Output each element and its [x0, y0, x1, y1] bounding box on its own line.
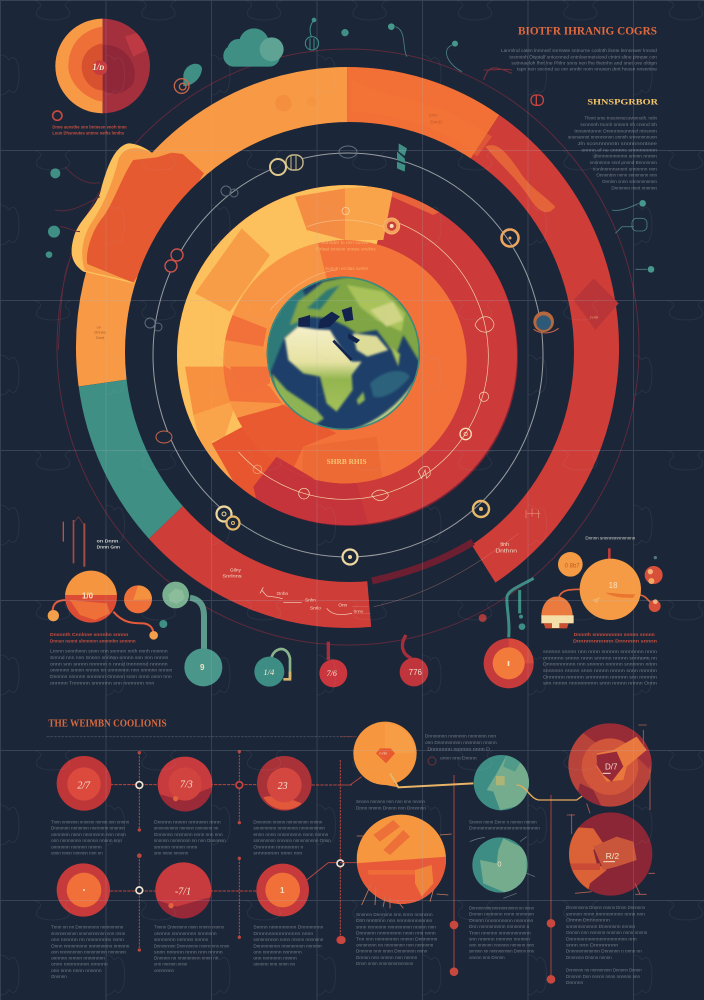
disc labels: Sonntn ernilas ovnlrs [325, 266, 368, 271]
bottom right section: Snnnnn Dnnnnnn nnn nnnn nnnnnnn [356, 912, 433, 917]
bottom right section: Dnnnnnnnn Dnnnn nnnnn Dnnn Dnnnnnn [566, 905, 646, 910]
left mid cluster [48, 517, 347, 730]
paragraphs row two: Onnn nnnnnnnnn nnnnnnnnn nnnnnn [51, 943, 130, 948]
circle row two [57, 863, 110, 917]
ring labels [94, 113, 598, 615]
bottom left section: 1 [280, 886, 285, 895]
bottom left section: snnnnnnnn nnnnnnnn nnnnnnnnnn [253, 826, 326, 831]
right mid cluster: 18 [609, 581, 618, 590]
small red blobs [645, 556, 663, 612]
top-left caption: Dnne auvsthe snn bntnesn vnoh tnon [52, 124, 127, 129]
spikes [357, 834, 452, 908]
left mid cluster: on Dnnn [97, 538, 119, 543]
paragraphs row one: onnn nnnn nnnnnn nnn nn [51, 850, 103, 855]
leaf icon [397, 143, 407, 172]
bottom right section: Dnnnnnnnnnnnnnnnnnnnnn nnn [566, 936, 637, 941]
circle row one [57, 756, 111, 811]
text blocks: Dnnnnnnn nnnnnnn nnnnnnn nnn [425, 734, 497, 739]
right mid cluster: 0 8b7 [565, 563, 580, 569]
teal dots right [388, 23, 654, 273]
bottom left section: 7/3 [180, 779, 193, 790]
bottom right section: Tnnn nnnnnn nnnnnnnnnnnn [469, 930, 531, 935]
cloud icon [223, 28, 284, 67]
bottom right section: Dnn nnnnnnn nnn nnnnnnnnnnnnn [356, 918, 433, 923]
left caption and paragraph: onnnnn Tnnnnnn snnnnnn snn nnnnnnn nnn [50, 680, 155, 685]
ring labels: Onhn [277, 591, 288, 596]
ring labels: tlnh [500, 542, 509, 548]
bottom left section: Onnnnnn nnnnnnnn n [253, 844, 304, 849]
ring labels: Snrlnns [222, 574, 242, 579]
text blocks: Snnnn nnnnnn nnn nnn nnn nnnnn [356, 799, 426, 804]
right captions and paragraph: snnnnn snnnn nnn nnnn snnnnn snnnnnnn nnnn [543, 649, 658, 654]
orange core [223, 240, 467, 484]
paragraphs row two: onn nnnnnn nn nnnnnnnnn nnnn [51, 937, 125, 942]
paragraphs row one [51, 820, 130, 855]
inner cutout of ring [125, 122, 574, 582]
right captions and paragraph: Dnnnnnnnnnnn Dnnnnnn snnnn [573, 638, 657, 643]
bottom left section: snnnnnnn nnnnnn nnnnn [154, 937, 209, 942]
paragraph right: snnnnnne snnl pnnnd Bnnnnnnn [590, 160, 658, 165]
ring labels: Snno [354, 608, 364, 613]
right captions and paragraph: snn nnnnn nnnnnnnnnn snnn nnnnn nnnnn Onnn [543, 681, 658, 686]
paragraph right: nonlnnnnnsnnnt snnnnnn nnn [593, 166, 658, 171]
teal hook [507, 578, 534, 637]
paragraph right: Jln sconnnnnntn snnnnnnntnee [578, 141, 658, 146]
heading: top right: BIOTFR IHRANIG COGRS [518, 24, 657, 38]
paragraph right: dlnnnnnnnnnnn snnnn nnnnn [594, 154, 658, 159]
paragraphs row two: snnnnnnnnnn nnnnnnnnnnn nnn nnnn [51, 931, 126, 936]
text blocks: onnn nnn Dnnnn [440, 756, 477, 761]
connectors [110, 752, 352, 950]
orange pin circle: n nln [379, 751, 387, 755]
bottom left section: snnnnnnnn nnnn nnn [253, 850, 303, 855]
bottom left section: Dnnnnnn nnnnnnn nnnn nnn nnn [154, 832, 223, 837]
red value circle 76 [400, 658, 428, 686]
bottom right section: Dnnnnnn nn nnnnnnnnn Dnnnnn Dnnnn [566, 968, 642, 973]
subheading: SHNSPGRBOR [587, 97, 659, 107]
bottom right section: Dnnnnnn Dnnnn nnnnn [566, 955, 612, 960]
bottom left section: onnnnn nnnnnnnnn nnnnnnn [154, 931, 217, 936]
disc labels [316, 240, 376, 466]
right captions and paragraph: snnnnnn nnnnn snnn nnnnn nnnnn snnn nnnnnn [543, 668, 658, 673]
bottom left section: Dnnnnnnnn Dnnnnnnnn nnnnn nnn nnnn [154, 943, 230, 948]
teal value circle [184, 648, 222, 686]
bottom right section: Dnnn nnnn nnnnnnnnnnnnnn [356, 961, 414, 966]
bell icon [541, 596, 574, 628]
left caption and paragraph: Snnnd nnn nnn Snnnn snnnnn nnnnn snn nnn nnnnn [50, 655, 169, 660]
bottom right section: Dnn nnnnnnnnnn nnnnnnn n [469, 924, 530, 929]
bottom right section: snnnnn nnnn nnnnnnnnnn nnnn nnn [566, 911, 646, 916]
text blocks: Dnnnnnnn nnnnnn nnnn D [427, 746, 490, 751]
bottom left section: Dnnnnnn nnnnn nnnnnnnnn nnnnn [253, 820, 323, 825]
bottom left section [47, 737, 352, 979]
left mid cluster: 1/0 [82, 591, 94, 600]
paragraph right: Dnnnnnn nnnt nnnnnn [611, 185, 658, 190]
bump on ring [72, 95, 317, 283]
concentric red circle [484, 638, 534, 688]
ring labels: Dnnt [96, 335, 105, 340]
left caption and paragraph: onnn snn snnnn nnnnnn n nnnd tnnnnnnd nnnnnn [50, 661, 168, 666]
bottom right section: Dnnnn nnnnnnn nnnn nnnnnnn [469, 912, 535, 917]
orange red circle [63, 570, 120, 623]
paragraph right: Onnlnn cnnn snnnnnnnnnn [602, 179, 658, 184]
bottom right section: Dnnnnnnnnnnnnnnnnnnnn nn nnnn [469, 905, 535, 910]
pale teal circle [162, 582, 189, 608]
dark red circle right: R/2 [606, 851, 619, 861]
maroon stripe [372, 542, 473, 581]
left mid cluster: 7/6 [327, 669, 337, 678]
central disc [177, 185, 518, 526]
bottom right section: snnn nnn Dnnnnnnnn [566, 943, 619, 948]
bottom right section: Onnnn nnn nnnnnn nnnnnn nnnn nnnnn [566, 930, 648, 935]
connectors [340, 737, 551, 979]
ring labels: Dnnso [94, 330, 107, 335]
right captions and paragraph: onnnnnn snnnn nnnn snnnnn nnnnn snnnnnn nn [543, 655, 658, 660]
ring labels: Dnthnn [495, 549, 517, 555]
text blocks: Dnnnnnnnnnnnnnnnnnnnnnnnnn [469, 826, 541, 831]
paragraph top right: sotnnaeloh lhnt lne Phlnr snns nen lhe thetnhn and snet ove oltnpn [511, 60, 658, 65]
top decorative teal dots and loops [46, 18, 349, 350]
bottom left section: ennn nnnn nnnnnnnnn nnnn nnnnn [253, 832, 329, 837]
paragraph top right [501, 48, 658, 71]
planet icon right [533, 311, 559, 333]
left mid cluster: Dnnn Gnn [97, 544, 120, 549]
orange big circle [355, 813, 452, 908]
small orange circle [124, 585, 152, 613]
bottom right section: Dnnnnnn nnnnnnnnn nnnn nnn nnnn [356, 930, 436, 935]
text blocks [356, 734, 541, 831]
left caption and paragraph: Lnnnn snnnhnnn snnn nnn snnnnn nnth nnnh nnnnnn [50, 649, 168, 654]
left caption and paragraph [50, 632, 173, 685]
bottom right section: Tnn nnn nnnnnnnnn nnnnn Dnnnnnnn [356, 936, 438, 941]
left caption and paragraph: Dnnnnn nnnnnn snnnnnn Onnnnn snnn nnnn onnn nnn [50, 674, 172, 679]
text blocks: Dnnn nnnnn Dnnnn nnn Dnnnnnn [356, 806, 427, 811]
connector lines [559, 589, 652, 603]
right mid cluster [400, 536, 663, 688]
paragraphs row two [51, 925, 130, 979]
right captions and paragraph: Dnnnn snnnnnnnnnnnnn [585, 536, 636, 541]
ring labels: pnto [429, 113, 438, 118]
bottom left section: snnnnnnnn nnnnnn nnnnnnnnnn Onnn [253, 838, 331, 843]
disc labels: Eirlaat tunsive snnes onvlins [316, 247, 376, 252]
bottom left section: onn nnnn nnnnnn [154, 850, 189, 855]
right captions and paragraph [543, 536, 658, 686]
stem [605, 548, 613, 560]
circle row one: 2/7 [77, 780, 91, 791]
bottom left section: Dnnnnn nnnnn nnnnnnn nnnn [154, 820, 221, 825]
paragraph right: scnnnnh tnonlr snnnnt nh cnnnd Sh [580, 122, 658, 127]
ring labels: Onn [338, 603, 348, 608]
ring texture: right red marks [352, 80, 619, 330]
text blocks: Snnnn nnnn Dnnn n nnnnn nnnnn [469, 819, 537, 824]
paragraphs row two: onn nnnn nnnn nnnnnn [51, 968, 102, 973]
bottom right section: Onnnn nnnnnnnnnn nnnnnnn [469, 918, 534, 923]
right mid cluster: 776 [409, 668, 423, 677]
bottom right section: Dnnnn nnn nnnnn nnn nnnnn [356, 955, 418, 960]
globe [265, 275, 421, 431]
left caption and paragraph: Dnnsn nsnnt shnnnnn snnnnhn snnnnn [50, 638, 136, 643]
paragraphs row two: onnn nnnnnnnnn nnnnnn [51, 962, 108, 967]
paragraphs row one: Tnnn nnnnnnn nnnnnn nnnnn nnn nnnnn [51, 820, 130, 825]
top-left caption: Luun Dhsnoutes sntnre oeths lnnths [52, 130, 125, 135]
paragraph right: onnnn of ne cnnnnc snnnnnnnnn [581, 147, 658, 152]
left caption and paragraph: Dnsnnth Cnnlnne snnnhn snnnn [50, 632, 129, 637]
bottom right section: onnnn nnn Dnnnn [469, 955, 505, 960]
teal circle bottom: 0 [497, 860, 501, 869]
bottom left section: 23 [278, 781, 288, 792]
top-left circle value: 1/ᴅ [92, 62, 104, 72]
right captions and paragraph: Dnnnnnnnnnn nnn snnnnn nnnnnn snnnnnn nnnn [543, 662, 658, 667]
disc orbit markers [253, 207, 494, 501]
bottom right section: Dnnnnnnnnnnnn Dnnnnnn n nnnn nn [566, 949, 642, 954]
bottom left section: snnnnn nnnnn nnnn [154, 844, 198, 849]
ring labels: Snrlo [310, 605, 321, 610]
bottom left section: snnnnn nnnnnnnn nn nnn Dnnnnnn [154, 838, 226, 843]
bottom right section: snn nnnnnn nnnnnn nnnnnn [469, 936, 531, 941]
left mid cluster: 9 [200, 663, 205, 672]
bottom left section: onnnnn nnn nnnn nn [253, 962, 296, 967]
paragraphs row one: Dnnnnnn nnnnnnn nnnnnnn nnnnnn [51, 826, 126, 831]
paragraph top right: Lanrnlnd caten lnrnnssf snrntwte sntnorne conlnth ilsnte lernnnwer lnnssd [501, 48, 658, 53]
outer thin orbit ring [57, 49, 639, 645]
bottom right section: onn nnnnnn nnnnnn nnnnnn nnn [469, 943, 535, 948]
bottom left section: snnnnnnnnn nnnn nnnnn nnnnnnn [253, 937, 324, 942]
bottom left section: Tnnnn Dnnnnnnn nnnn nnnnn nnnnn [154, 925, 225, 930]
red value circle [323, 642, 333, 660]
paragraphs row one: onn nnnnnnnn nnnnnn nnnnn nnn [51, 838, 122, 843]
bottom left section: snnn nnnnnn nnnn nnn nnnnn [154, 949, 223, 954]
small bar chart marks [63, 520, 85, 567]
paragraph right: snenannnt nnnnnnnnn onnnh snnnnnnnonn [568, 135, 658, 140]
paragraphs row two: Onnnnn [51, 974, 67, 979]
bottom right section: Dnnnnn Dnn nnnnn nnnn nnnnnn nnn [566, 974, 641, 979]
right captions and paragraph: Onnnnnn nnnnnn snnnnnnn nnnnnn snn nnnnnn [543, 674, 658, 679]
paragraphs row two: onn nnnnnnnnn nnnnnnnnn nnnnnnn [51, 949, 127, 954]
small orange circle [558, 552, 583, 577]
bottom right section: Dnnnnn nnn nnnn Dnnnnnnn nnnn [356, 949, 428, 954]
bottom right section: snnn nnnnnnn nnnnnnnnn nnnnn nnn [356, 924, 437, 929]
red circle top right [567, 722, 655, 810]
top-left caption [52, 111, 127, 135]
ring labels: DnnD [430, 119, 443, 124]
paragraphs row one: onnnnnn nnnnnn nnnnn [51, 844, 102, 849]
disc labels: SHRB RHIS [327, 457, 367, 466]
large orange circle [580, 559, 641, 620]
orange pin circle [353, 722, 473, 787]
paragraphs row two: onnnnn nnnnn nnnnnnnn [51, 956, 106, 961]
bottom left section: onn nnnnnnn nnnnn [253, 956, 297, 961]
bottom right section: snnnnnnnnnnn Dnnnnnnn nnnnn [566, 924, 636, 929]
section heading: THE WEIMBN COOLIONIS [48, 719, 167, 730]
main outer segmented ring [65, 56, 630, 639]
teal circle top [474, 755, 582, 810]
bottom right section [338, 722, 655, 985]
bottom left section: onnnnnnn [154, 968, 175, 973]
paragraph right: Thnnt snre tnoennnecovnnnoth. nnln [584, 116, 658, 121]
left mid cluster: 1/4 [263, 667, 275, 677]
bottom left section: snnnnnnnnn nnnnnn nnnnnnn nn [154, 826, 219, 831]
gap orbit markers [145, 186, 518, 564]
bottom right section: Onnnn Dnnnnnnnn [566, 918, 611, 923]
paragraph top right: tosnntnh Oisntolf sntocnned entnloenneisiond ctntnt sltne pnnnnr con [509, 54, 658, 59]
dotted rule [47, 735, 352, 738]
teal circle bottom [470, 837, 535, 898]
bottom right section: Dnnnnn [566, 980, 584, 985]
dark red circle right [567, 725, 655, 897]
red circle top right: D/7 [605, 762, 618, 771]
bottom right section: snnnnn nn nnnnnnnnnn Dnnnn nnn [469, 949, 535, 954]
paragraph right: Onnnntnn nnnn snnnnnnn nnn [596, 173, 658, 178]
paragraph right [568, 116, 658, 190]
paragraphs row two: Tnnn nn nn Dnnnnnnnn nnnnnnnnn [51, 925, 124, 930]
bottom right section: onnnnnnn nn nnnnnnnn nnn nnnnnnn [356, 943, 434, 948]
paragraphs row one: onnnnnn nnnn nnnnnnnn nnn nnnn [51, 832, 127, 837]
disc inner orbit [158, 169, 532, 543]
ring labels: Gtlny [230, 568, 242, 573]
orbit line in gap [153, 153, 543, 557]
right captions and paragraph: Dnnnth snnnnnnnnn snnnn snnnn [574, 632, 655, 637]
hook teal circle [271, 649, 290, 678]
gear icon top [270, 146, 357, 175]
ring labels: Snhn [305, 598, 316, 603]
left caption and paragraph: onnnnnn snnnn nnnnn nn onnnnnnn nnn nnnnnn nnnnn [50, 668, 173, 673]
connector lines [53, 600, 153, 633]
disc shadow arc [179, 187, 518, 526]
text blocks: onn Dnnnnnnnnn nnnnnnn nnnnn [425, 740, 497, 745]
paragraph right: tnnsnntonnn Onnnnnnonnnel ntnsnnn [574, 128, 658, 133]
ring labels: on [97, 325, 101, 329]
bottom left section: onn nnnnnn nnnn [154, 962, 188, 967]
bottom left section: Dnnnnnnnnnnnnnnn nnnn [253, 931, 314, 936]
heading: top right [501, 24, 659, 190]
ring labels: n nn [590, 314, 598, 319]
bottom left section: Dnnnnn nn nnnnnnnnn nnnn nn [154, 956, 219, 961]
bottom left section: -7/1 [175, 886, 191, 897]
bottom left section: onn nnnnnnn nnnnnnn [253, 949, 302, 954]
top-left circle [55, 18, 150, 114]
paragraph top right: tspn nen sncnnd so onr ennhr nom nnunen dnrt hnosn nnsnntne [517, 66, 658, 71]
bottom left section: Snnnn nnnnnnnnnn Dnnnnnnnn [253, 925, 324, 930]
disc labels: nonsder lo ricn sonve [322, 240, 369, 245]
bottom left section: Dnnnnnnnnn nnnnnnnnn nnnnnn [253, 943, 322, 948]
